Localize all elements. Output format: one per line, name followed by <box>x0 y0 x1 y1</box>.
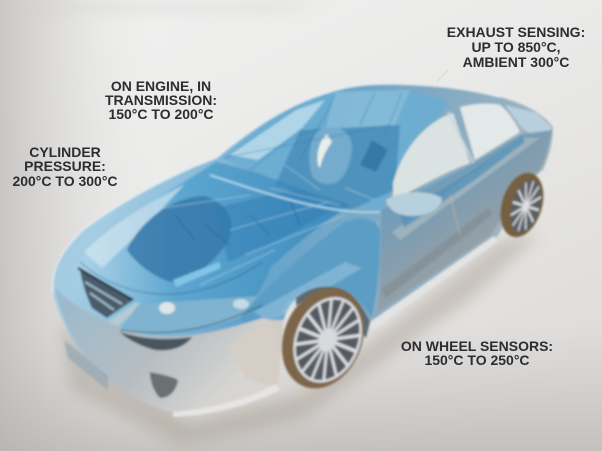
label: on wheel sensors: 150°C TO 250°C <box>424 352 530 368</box>
panel: front fender <box>238 219 380 340</box>
panel: door side <box>378 130 552 312</box>
label: on engine, in transmission <box>105 78 217 122</box>
label: exhaust sensing <box>447 24 585 70</box>
licence plate <box>64 340 108 390</box>
label: cylinder pressure: CYLINDER <box>29 144 101 160</box>
label: cylinder pressure: 200°C TO 300°C <box>12 173 118 189</box>
label: on engine, in transmission: 150°C TO 200°C <box>108 106 214 122</box>
icon: lower air intake <box>150 372 178 398</box>
label: cylinder pressure: PRESSURE: <box>24 158 106 174</box>
rear wheel <box>493 168 551 242</box>
panel: front bumper <box>55 288 280 412</box>
label: on engine, in transmission: ON ENGINE, IN <box>111 78 211 94</box>
label: exhaust sensing: AMBIENT 300°C <box>463 54 569 70</box>
front wheel <box>267 275 379 401</box>
label: on wheel sensors: ON WHEEL SENSORS: <box>401 338 553 354</box>
icon: front grille <box>78 268 142 326</box>
antenna <box>437 70 448 82</box>
icon: headlight <box>120 296 258 350</box>
label: exhaust sensing: EXHAUST SENSING: <box>447 24 585 40</box>
panel: windshield and cabin <box>223 90 448 210</box>
label: on engine, in transmission: TRANSMISSION: <box>105 92 217 108</box>
label: cylinder pressure <box>12 144 118 189</box>
car body silhouette <box>53 84 553 417</box>
label: on wheel sensors <box>401 338 553 368</box>
icon: wing mirror <box>386 192 442 216</box>
label: exhaust sensing: UP TO 850°C, <box>471 38 561 54</box>
panel: hood <box>78 162 350 333</box>
panel: side windows <box>393 104 552 200</box>
